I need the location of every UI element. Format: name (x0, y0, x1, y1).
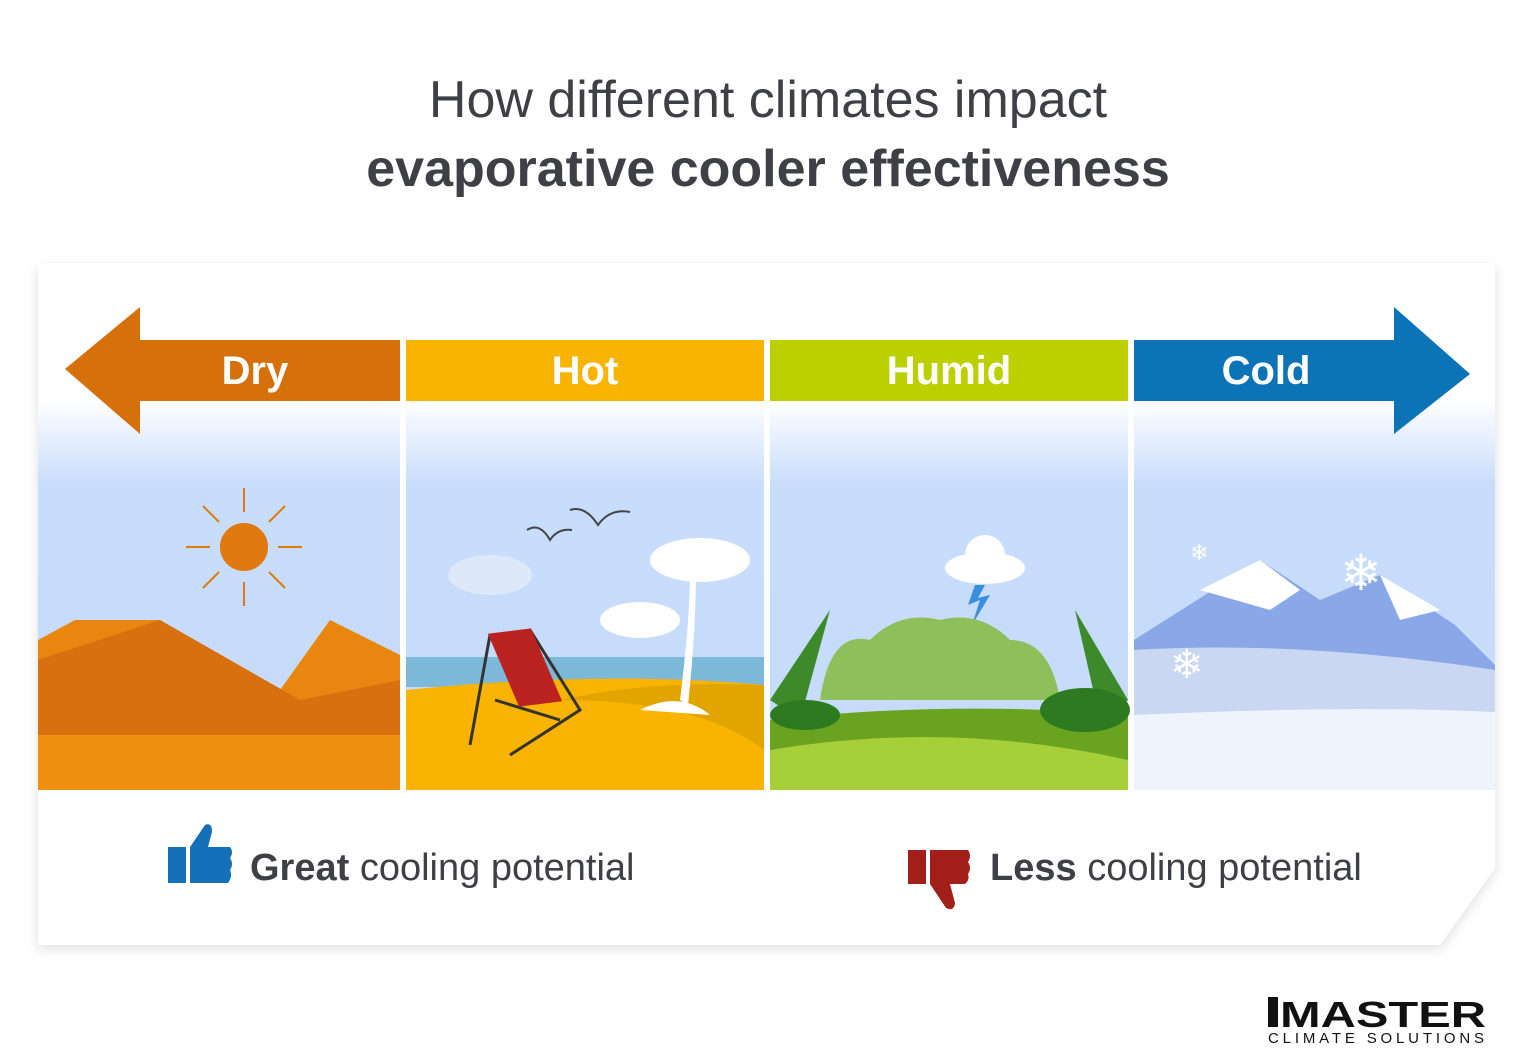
icon: sun (186, 488, 302, 606)
header: cold arrow: Cold (1222, 349, 1310, 393)
card (38, 263, 1495, 945)
panel: dry (38, 400, 400, 790)
icon: snowflakes: ❄ (1340, 545, 1382, 601)
header: humid: Humid (887, 349, 1011, 393)
header: cold arrow (1134, 307, 1470, 434)
icon: birds (527, 509, 630, 540)
icon: thumbs up (168, 824, 232, 883)
icon: cloud lightning (945, 535, 1025, 625)
header: dry arrow (65, 307, 400, 434)
header: hot (406, 340, 764, 401)
title: How different climates impact (429, 71, 1108, 129)
logo: MASTER (1280, 994, 1486, 1035)
logo (1268, 994, 1486, 1047)
panel: hot (406, 400, 764, 790)
text: great: Great cooling potential (250, 847, 634, 889)
text: less: Less cooling potential (990, 847, 1362, 889)
panel: cold (1134, 400, 1495, 790)
panel: humid (770, 400, 1130, 790)
icon: snowflakes: ❄ (1190, 540, 1208, 565)
header: hot: Hot (552, 349, 618, 393)
logo: CLIMATE SOLUTIONS (1268, 1030, 1484, 1047)
header: humid (770, 340, 1128, 401)
header: dry arrow: Dry (222, 349, 289, 393)
title: evaporative cooler effectiveness (366, 140, 1170, 198)
icon: thumbs down (908, 850, 970, 909)
title (366, 71, 1170, 198)
icon: palms (600, 538, 750, 715)
icon: snowflakes (1170, 540, 1382, 687)
icon: snowflakes: ❄ (1170, 643, 1204, 687)
icon: beach chair (470, 630, 580, 755)
